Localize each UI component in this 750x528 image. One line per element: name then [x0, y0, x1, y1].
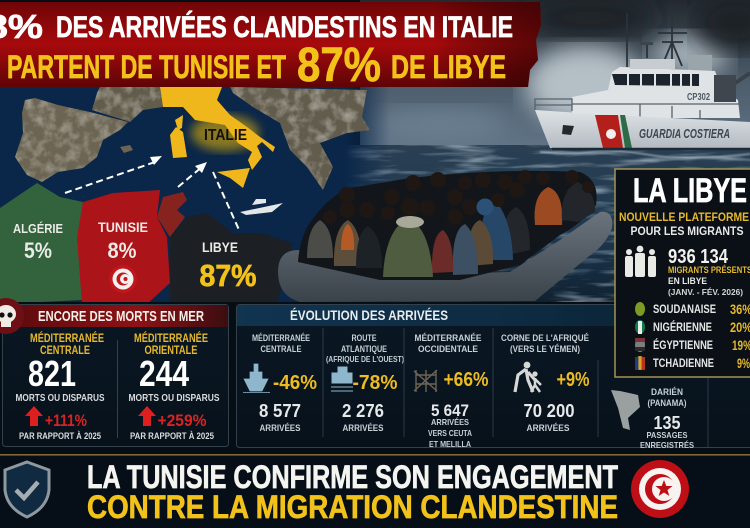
column: Darién: (PANAMA): [648, 398, 686, 409]
nationality: nigérienne: NIGÉRIENNE: [653, 319, 712, 334]
heads: [323, 170, 594, 225]
Algeria: [0, 183, 83, 304]
column: Méditerranée orientale: +259%: [158, 412, 207, 430]
hull hatch: [562, 125, 574, 135]
column: Méditerranée occidentale: ET MELILLA: [429, 439, 471, 449]
divider: [707, 378, 709, 447]
column: Méditerranée centrale: ARRIVÉES: [260, 423, 300, 434]
column: Méditerranée orientale: 244: [139, 353, 189, 394]
column: corne de l'Afrique: ARRIVÉES: [526, 423, 570, 434]
panel: encore des morts en mer: [0, 298, 228, 446]
panel: évolution des arrivées: [236, 304, 750, 450]
column: Méditerranée centrale: 821: [28, 353, 76, 394]
hull emblem: [606, 129, 616, 139]
migrant bodies: [307, 182, 595, 277]
icon: boat: [243, 364, 270, 392]
icon: South America map: [611, 390, 640, 430]
title line 1: DES ARRIVÉES CLANDESTINS EN ITALIE: [56, 10, 513, 44]
background sky: [360, 0, 750, 146]
title line 2: PARTENT DE TUNISIE ET: [7, 49, 286, 85]
label Italie: ITALIE: [204, 127, 247, 144]
bridge cabin top: [630, 59, 675, 69]
Balearic islands: [120, 145, 133, 153]
crane: [722, 73, 750, 92]
tower: [688, 55, 712, 77]
icon: shield: [5, 462, 49, 517]
radar: [640, 42, 653, 45]
column: Méditerranée occidentale: VERS CEUTA: [428, 428, 472, 438]
title line 2: DE LIBYE: [391, 49, 506, 85]
column: Méditerranée centrale: CENTRALE: [40, 345, 90, 357]
railing: [535, 99, 750, 120]
nationality: tchadienne: TCHADIENNE: [653, 356, 714, 370]
column: Méditerranée centrale: -46%: [273, 372, 317, 394]
migrant description: EN LIBYE: [668, 276, 707, 286]
heading: [3, 305, 228, 327]
divider: [403, 328, 405, 437]
masts: [627, 13, 687, 67]
column: corne de l'Afrique: [501, 333, 590, 434]
divider: [492, 328, 494, 437]
column: Méditerranée occidentale: MÉDITERRANÉE: [414, 333, 482, 344]
icon: three people: [625, 246, 656, 277]
Balkans and Greece: [230, 87, 370, 190]
column: Méditerranée centrale: PAR RAPPORT À 2025: [19, 431, 102, 442]
bottom banner: [0, 454, 750, 528]
column: Méditerranée centrale: MÉDITERRANÉE: [252, 333, 310, 344]
line 2: CONTRE LA MIGRATION CLANDESTINE: [87, 489, 618, 525]
label Libye: 87%: [200, 258, 256, 293]
title line 2: [7, 39, 506, 92]
column: Méditerranée occidentale: [414, 333, 489, 449]
label Libye: [200, 240, 256, 293]
olive hood: [396, 216, 424, 228]
icon: Tunisian flag on map: [109, 265, 137, 293]
column: route atlantique: ARRIVÉES: [342, 423, 384, 434]
label Tunisie: TUNISIE: [98, 220, 148, 235]
figure 936 134: 936 134: [668, 246, 729, 268]
column: Méditerranée centrale: [252, 333, 317, 434]
label Algérie: 5%: [24, 238, 52, 263]
column: Méditerranée centrale: +111%: [45, 412, 87, 430]
blue hood: [476, 198, 494, 216]
column: corne de l'Afrique: (VERS LE YÉMEN): [510, 344, 580, 355]
column: Méditerranée occidentale: OCCIDENTALE: [418, 344, 478, 355]
migrant description: [668, 265, 750, 297]
icon: ship on waves: [331, 367, 353, 391]
nationality: égyptienne: [635, 337, 750, 353]
Tunisia highlighted block: [77, 190, 170, 304]
icon: skull: [0, 298, 24, 334]
hull stripe green: [620, 115, 632, 148]
waterline: [552, 148, 750, 150]
Libya: [170, 213, 293, 304]
title banner: [0, 2, 541, 92]
bottom panels backdrop: [0, 302, 750, 528]
column: Méditerranée occidentale: 5 647: [431, 401, 469, 420]
label Tunisie: [98, 220, 148, 263]
subheading: [619, 210, 749, 238]
line 1: LA TUNISIE CONFIRME SON ENGAGEMENT: [87, 459, 618, 495]
column: Darién: ENREGISTRÉS: [640, 440, 694, 450]
column: Méditerranée orientale: MÉDITERRANÉE: [134, 332, 208, 345]
nationality: nigérienne: [635, 319, 750, 335]
heading: ÉVOLUTION DES ARRIVÉES: [290, 308, 448, 323]
nationality: soudanaise: SOUDANAISE: [653, 302, 716, 316]
title line 2: 87%: [297, 39, 381, 92]
label Algérie: ALGÉRIE: [13, 221, 63, 236]
fade between map and sea: [345, 86, 390, 304]
France: [92, 87, 163, 122]
column: route atlantique: [326, 333, 404, 434]
ship number: CP302: [687, 92, 710, 103]
title line 1: [0, 8, 513, 45]
background sea: [300, 145, 750, 310]
inflatable boat with migrants: [278, 170, 612, 302]
column: corne de l'Afrique: +9%: [556, 369, 590, 391]
hull stripe red: [595, 115, 623, 148]
icon: walking adult and child: [515, 362, 541, 392]
hull: [535, 110, 750, 148]
Sardinia: [170, 127, 187, 158]
column: Méditerranée orientale: [128, 332, 220, 442]
icon: border fence: [414, 370, 437, 392]
nationality: tchadienne: [635, 355, 750, 371]
column: Méditerranée centrale: CENTRALE: [260, 344, 302, 355]
column: Méditerranée orientale: MORTS OU DISPARUS: [128, 392, 220, 404]
column: Méditerranée centrale: [16, 332, 104, 442]
Sicily: [217, 168, 250, 188]
column: route atlantique: -78%: [352, 372, 398, 394]
column: Méditerranée centrale: 8 577: [259, 401, 301, 421]
column divider: [116, 340, 118, 438]
map of the Mediterranean: [0, 86, 390, 304]
glow around Italy: [191, 115, 259, 151]
column: Darién: [640, 387, 694, 450]
arrow heads: [150, 156, 207, 173]
Italy: [160, 87, 275, 170]
Spain: [15, 98, 128, 182]
Corsica: [175, 115, 183, 130]
icon: red up arrow: [25, 406, 43, 426]
window pillars: [628, 74, 691, 86]
small ship on map: [240, 199, 283, 215]
column: route atlantique: ROUTE: [352, 333, 376, 344]
nationality: égyptienne: ÉGYPTIENNE: [653, 337, 713, 352]
banner edge shade: [0, 2, 541, 87]
heading: ENCORE DES MORTS EN MER: [38, 309, 204, 325]
ship Guardia Costiera: [535, 13, 750, 149]
column: Méditerranée orientale: ORIENTALE: [144, 345, 198, 357]
heading: [237, 305, 750, 326]
divider: [597, 360, 599, 437]
column: Méditerranée centrale: MÉDITERRANÉE: [30, 332, 104, 345]
column: Méditerranée occidentale: +66%: [444, 369, 489, 391]
boat: [278, 212, 612, 302]
column: route atlantique: (AFRIQUE DE L'OUEST): [326, 355, 404, 364]
route arrows: [65, 162, 240, 232]
nationality: soudanaise: [635, 301, 750, 317]
bridge windows: [612, 74, 699, 86]
crowd mass: [298, 171, 597, 280]
column: Méditerranée occidentale: ARRIVÉES: [431, 417, 469, 427]
panel: la Libye: [615, 169, 750, 377]
label Tunisie: 8%: [108, 238, 136, 263]
column: Darién: PASSAGES: [646, 430, 688, 440]
divider: [322, 328, 324, 437]
column: route atlantique: ATLANTIQUE: [341, 344, 387, 355]
icon: Tunisian flag: [631, 460, 689, 518]
column: corne de l'Afrique: CORNE DE L'AFRIQUÉ: [501, 333, 589, 344]
column: corne de l'Afrique: 70 200: [524, 401, 574, 421]
label Libye: LIBYE: [202, 240, 238, 255]
upper cabin: [572, 67, 740, 118]
banner background: [0, 2, 541, 87]
map sea: [0, 86, 345, 304]
icon: red up arrow: [138, 406, 156, 426]
column: Méditerranée orientale: PAR RAPPORT À 2025: [130, 431, 215, 442]
label Algérie: [13, 221, 63, 263]
Tunisia territory: [157, 192, 187, 237]
migrant description: (JANV. - FÉV. 2026): [668, 287, 743, 297]
column: Darién: DARIÉN: [651, 387, 683, 398]
column: Méditerranée centrale: MORTS OU DISPARUS: [16, 392, 104, 404]
column: route atlantique: 2 276: [342, 401, 384, 421]
aft equipment: [714, 75, 736, 102]
column: Darién: 135: [654, 413, 680, 433]
